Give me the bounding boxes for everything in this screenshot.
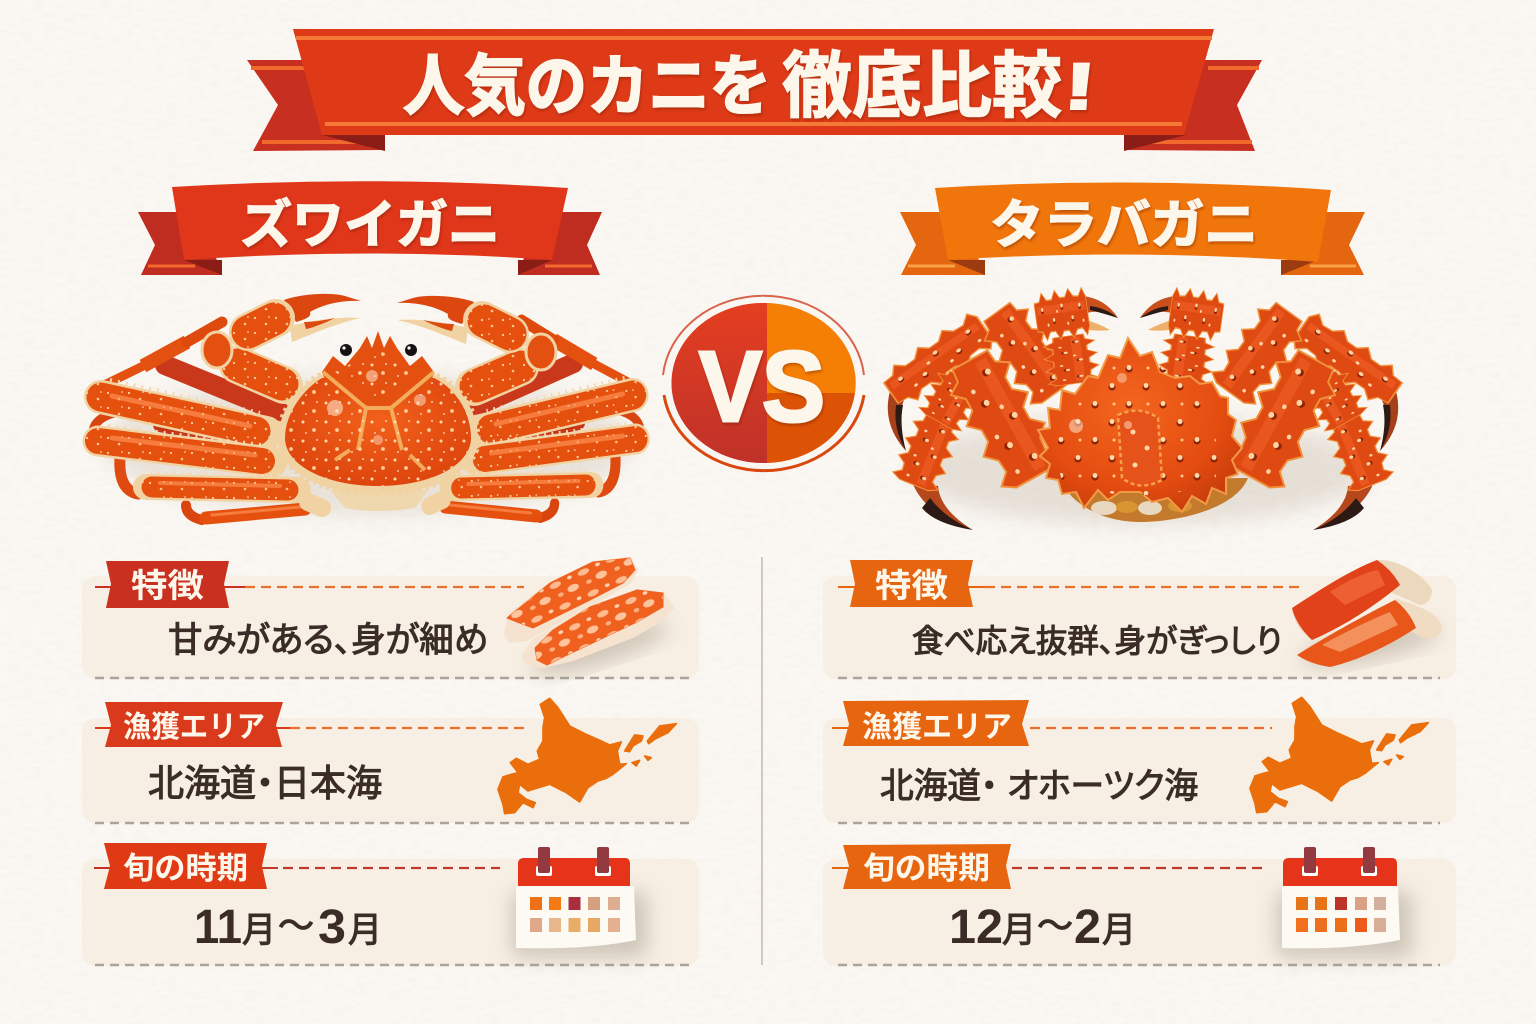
season text: 〜: [278, 907, 314, 946]
icon: calendar: [1277, 847, 1412, 957]
tag: fishing area: [105, 702, 283, 747]
season text: 2: [1074, 901, 1101, 954]
tag: features: 特徴: [875, 567, 948, 604]
season text: 月: [348, 911, 382, 950]
VS text: VS: [699, 331, 825, 443]
season text: 3: [318, 901, 346, 954]
icon: snow crab meat: [505, 558, 673, 684]
area text: 北海道・日本海: [148, 763, 382, 804]
panel: snow crab season: [82, 843, 699, 966]
panel: king crab features: [823, 560, 1456, 679]
tag: features: [850, 560, 973, 607]
title text: 徹底比較: [782, 47, 1062, 127]
right heading ribbon: タラバガニ: [900, 182, 1365, 275]
snow crab eyes: [340, 344, 417, 356]
title ribbon: [247, 29, 1262, 151]
icon: Hokkaido map: [1250, 697, 1428, 813]
season text: 月: [1102, 911, 1136, 950]
snow crab carapace: [278, 331, 478, 511]
panel: snow crab features: [82, 558, 699, 684]
panel: snow crab area: [82, 698, 699, 823]
tag: season: 旬の時期: [123, 851, 248, 886]
season text: [949, 901, 1136, 954]
center divider: [761, 557, 763, 965]
area text: 北海道・ オホーツク海: [880, 767, 1198, 806]
icon: king crab meat: [1292, 560, 1442, 673]
icon: Hokkaido map: [498, 698, 676, 814]
left heading ribbon: ズワイガニ: ズワイガニ: [240, 197, 500, 255]
panel: king crab area: [823, 697, 1456, 823]
season text: 月: [1002, 911, 1036, 950]
tag: fishing area: [843, 700, 1029, 746]
features text: 甘みがある、身が細め: [168, 621, 488, 660]
season text: 11: [194, 901, 242, 954]
tag: season: 旬の時期: [863, 851, 990, 886]
season text: 12: [949, 901, 1003, 954]
snow crab illustration: [93, 294, 640, 520]
tag: features: [106, 561, 229, 608]
king crab carapace: [1038, 338, 1242, 512]
tag: season: [104, 843, 267, 889]
king crab illustration: [878, 286, 1408, 530]
season text: 〜: [1037, 907, 1073, 946]
king crab underside: [1060, 478, 1248, 522]
season text: 月: [242, 911, 276, 950]
panel: king crab season: [823, 844, 1456, 966]
title text: 人気のカニを: [403, 49, 771, 123]
VS badge: [663, 296, 864, 471]
tag: features: 特徴: [131, 567, 204, 604]
title text: !: [1061, 50, 1098, 124]
tag: season: [843, 844, 1011, 889]
features text: 食べ応え抜群、身がぎっしり: [912, 623, 1282, 659]
title text: [403, 47, 1098, 127]
season text: [194, 901, 382, 954]
tag: fishing area: 漁獲エリア: [123, 711, 265, 744]
left heading ribbon: ズワイガニ: [138, 181, 602, 275]
icon: calendar: [512, 847, 647, 957]
tag: fishing area: 漁獲エリア: [862, 711, 1012, 744]
right heading ribbon: タラバガニ: タラバガニ: [990, 197, 1258, 255]
